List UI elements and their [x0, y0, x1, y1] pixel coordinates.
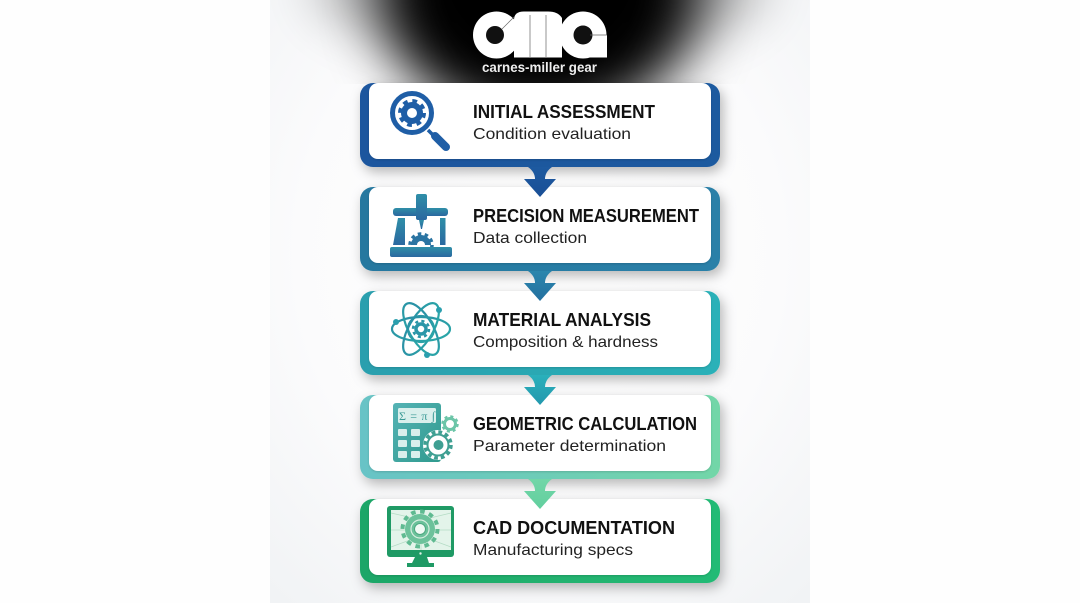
subtitle: Parameter determination — [473, 438, 666, 455]
step 5: cad documentation — [360, 499, 720, 583]
icon: atom with gear — [392, 298, 450, 360]
subtitle: Data collection — [473, 230, 587, 247]
step 3: material analysis — [360, 291, 720, 375]
icon: calculator with gears — [393, 403, 458, 462]
step 2: precision measurement — [360, 187, 720, 271]
logo wordmark: carnes-miller gear — [482, 59, 598, 75]
arrow: step 3 to 4 — [524, 375, 556, 405]
subtitle: Composition & hardness — [473, 334, 658, 351]
logo — [473, 12, 607, 75]
heading: GEOMETRIC CALCULATION — [473, 414, 697, 434]
heading: MATERIAL ANALYSIS — [473, 310, 651, 330]
dark logo backdrop — [297, 0, 783, 84]
icon: magnifier with gear — [392, 94, 446, 147]
arrow: step 1 to 2 — [524, 167, 556, 197]
heading: CAD DOCUMENTATION — [473, 518, 675, 538]
heading: PRECISION MEASUREMENT — [473, 206, 699, 226]
arrow: step 4 to 5 — [524, 479, 556, 509]
subtitle: Condition evaluation — [473, 126, 631, 143]
icon: calculator with gears: Σ=π∫ — [399, 409, 436, 423]
arrow: step 2 to 3 — [524, 271, 556, 301]
step 1: initial assessment — [360, 83, 720, 167]
step 4: geometric calculation — [360, 395, 720, 479]
subtitle: Manufacturing specs — [473, 542, 633, 559]
heading: INITIAL ASSESSMENT — [473, 102, 655, 122]
logo mark — [473, 12, 607, 58]
icon: coordinate measuring machine — [390, 194, 452, 257]
icon: monitor with cad gear — [387, 506, 454, 567]
